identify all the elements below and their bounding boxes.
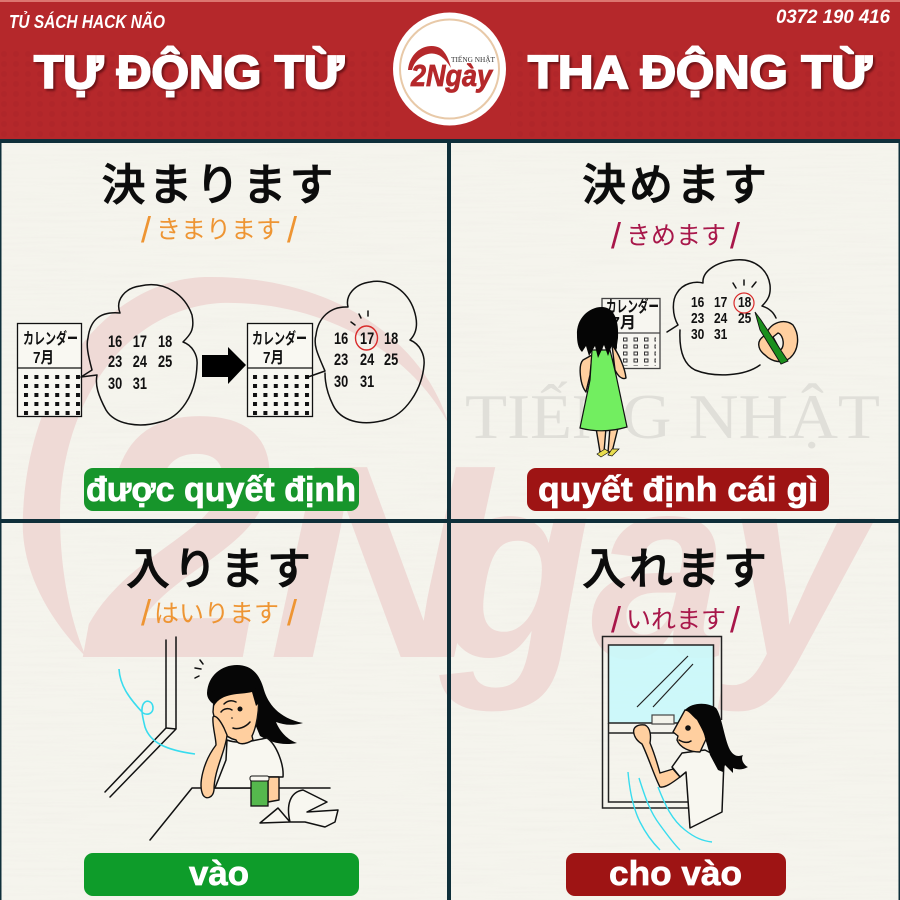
reading: はいります xyxy=(154,600,279,628)
hand with pencil xyxy=(755,312,798,364)
speech bubble xyxy=(81,285,197,425)
meaning pill xyxy=(84,853,359,896)
panel: kimarimasu xyxy=(18,161,424,511)
reading: いれます xyxy=(626,606,726,634)
book xyxy=(260,790,338,827)
watermark logo: gay xyxy=(436,420,878,714)
face xyxy=(213,689,259,744)
speech bubble with highlighted date: 16 xyxy=(334,329,348,349)
speech bubble with highlighted date: 30 xyxy=(334,372,348,392)
reading: / xyxy=(730,599,740,640)
reading: / xyxy=(611,215,621,256)
speech bubble: 31 xyxy=(714,326,728,342)
breeze xyxy=(628,772,712,850)
calendar: 7月 xyxy=(263,350,284,367)
speech bubble: 18 xyxy=(158,332,172,352)
speech bubble: 23 xyxy=(108,352,122,372)
calendar: 7月 xyxy=(33,350,54,367)
speech bubble: 16 xyxy=(108,332,122,352)
reading: / xyxy=(611,599,621,640)
speech bubble: 31 xyxy=(133,374,147,394)
arrow xyxy=(202,347,246,384)
speech bubble: 18 xyxy=(738,294,752,310)
speech bubble with highlighted date: 25 xyxy=(384,350,398,370)
watermark logo: 2 xyxy=(83,346,273,731)
phone number: 0372 190 416 xyxy=(776,7,890,28)
word: 入れます xyxy=(582,545,770,594)
calendar xyxy=(248,324,312,416)
meaning pill: cho vào xyxy=(609,855,742,893)
watermark logo: N xyxy=(268,408,499,716)
reading: / xyxy=(141,592,151,633)
breeze xyxy=(119,669,195,754)
reading: / xyxy=(141,209,151,250)
word: 入ります xyxy=(126,545,314,594)
speech bubble: 24 xyxy=(133,352,147,372)
window corner xyxy=(105,637,176,797)
heading: tu dong tu: TỰ ĐỘNG TỪ xyxy=(34,46,345,98)
series label: TỦ SÁCH HACK NÃO xyxy=(9,11,165,32)
sparks xyxy=(195,660,203,678)
calendar: カレンダー xyxy=(252,329,307,348)
word: 決めます xyxy=(582,161,770,210)
window xyxy=(602,636,722,808)
panel: iremasu xyxy=(566,545,786,896)
speech bubble: 24 xyxy=(714,310,728,326)
desk xyxy=(150,788,330,840)
reading: / xyxy=(287,592,297,633)
speech bubble: 25 xyxy=(738,310,752,326)
hair xyxy=(207,665,303,744)
reading: きまります xyxy=(156,216,281,244)
speech bubble: 30 xyxy=(691,326,704,342)
meaning pill: quyết định cái gì xyxy=(538,471,818,509)
reading: きめます xyxy=(626,222,726,250)
cup xyxy=(251,780,268,806)
meaning pill: vào xyxy=(189,855,249,893)
watermark text: TIẾNG NHẬT xyxy=(465,381,880,452)
calendar xyxy=(602,297,660,368)
logo badge: TIẾNG NHẬT xyxy=(451,56,496,64)
speech bubble with highlighted date: 17 xyxy=(360,329,374,349)
logo badge: 2Ngày xyxy=(410,58,494,93)
meaning pill xyxy=(566,853,786,896)
speech bubble: 17 xyxy=(133,332,147,352)
speech bubble xyxy=(667,260,776,375)
meaning pill: được quyết định xyxy=(86,471,356,509)
header band xyxy=(0,0,900,139)
speech bubble: 23 xyxy=(691,310,705,326)
speech bubble with highlighted date: 24 xyxy=(360,350,375,370)
heading: tha dong tu: THA ĐỘNG TỪ xyxy=(528,46,873,98)
shirt xyxy=(215,738,283,788)
speech bubble with highlighted date: 31 xyxy=(360,372,374,392)
watermark logo xyxy=(23,277,878,731)
logo badge xyxy=(393,12,506,126)
calendar: カレンダー xyxy=(23,329,78,348)
girl at table xyxy=(150,660,338,840)
speech bubble: 17 xyxy=(714,294,727,310)
panel: hairimasu xyxy=(84,545,359,896)
girl from behind xyxy=(577,307,627,457)
reading: / xyxy=(287,209,297,250)
calendar xyxy=(18,324,82,416)
speech bubble: 30 xyxy=(108,374,122,394)
speech bubble with highlighted date: 18 xyxy=(384,329,398,349)
word: 決まります xyxy=(102,161,336,210)
arm xyxy=(201,716,227,798)
panel: kimemasu xyxy=(527,161,829,511)
speech bubble with highlighted date: 23 xyxy=(334,350,348,370)
calendar: 7月 xyxy=(611,315,636,332)
girl at window xyxy=(634,704,748,828)
speech bubble with highlighted date xyxy=(308,281,424,423)
speech bubble: 25 xyxy=(158,352,172,372)
calendar: カレンダー xyxy=(606,297,659,316)
hand xyxy=(268,777,279,802)
reading: / xyxy=(730,215,740,256)
speech bubble: 16 xyxy=(691,294,705,310)
